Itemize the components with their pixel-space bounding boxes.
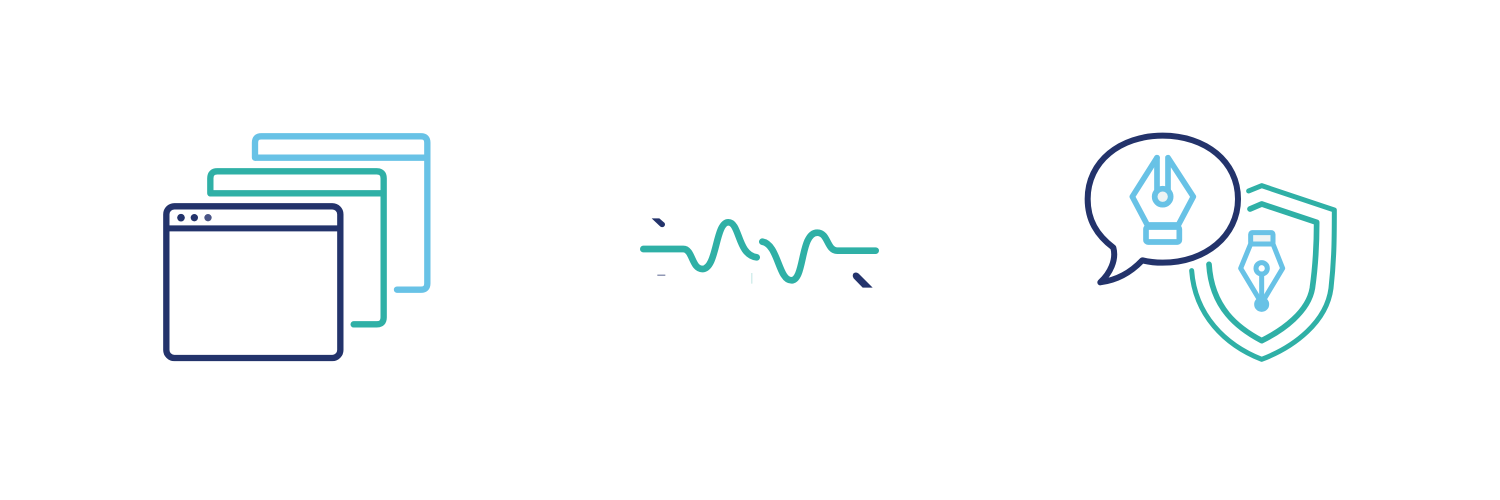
teal wave right [762, 233, 876, 280]
pen nib in bubble [1132, 158, 1193, 242]
teal outer shield [1192, 186, 1334, 359]
icon: speech bubble and shield with pen nibs [1088, 136, 1334, 359]
light blue back window [255, 136, 427, 290]
pen nib in shield [1241, 233, 1283, 309]
teal wave left [643, 222, 757, 269]
navy fragment dash [657, 274, 665, 277]
teal fragment sliver [751, 273, 752, 284]
navy front window [166, 206, 340, 358]
navy fragment bottom [853, 272, 873, 288]
window control dots [177, 214, 212, 221]
teal inner shield [1209, 204, 1317, 341]
icon: stacked browser windows [166, 136, 427, 358]
teal middle window [210, 171, 384, 324]
navy speech bubble [1088, 136, 1238, 282]
navy fragment top [652, 218, 665, 227]
icon: signal wave with clipped fragments [643, 218, 876, 288]
